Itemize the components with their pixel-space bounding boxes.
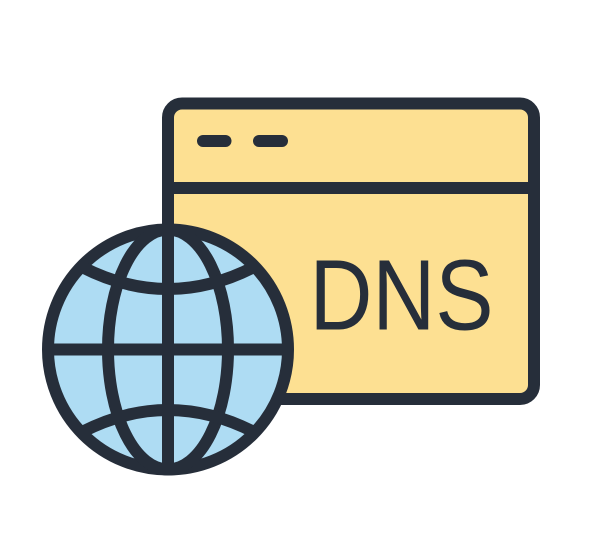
upper latitude arc (82, 267, 254, 289)
central meridian (162, 230, 174, 470)
title bar divider (168, 182, 534, 194)
DNS label: DNS (310, 240, 494, 352)
globe disc (48, 230, 288, 470)
lower latitude arc (82, 410, 254, 432)
panel: browser window (168, 104, 534, 399)
icon: globe (48, 230, 288, 470)
window frame (168, 104, 534, 399)
equator (48, 344, 288, 356)
window control dashes (197, 135, 288, 147)
meridian ellipse (108, 230, 228, 470)
